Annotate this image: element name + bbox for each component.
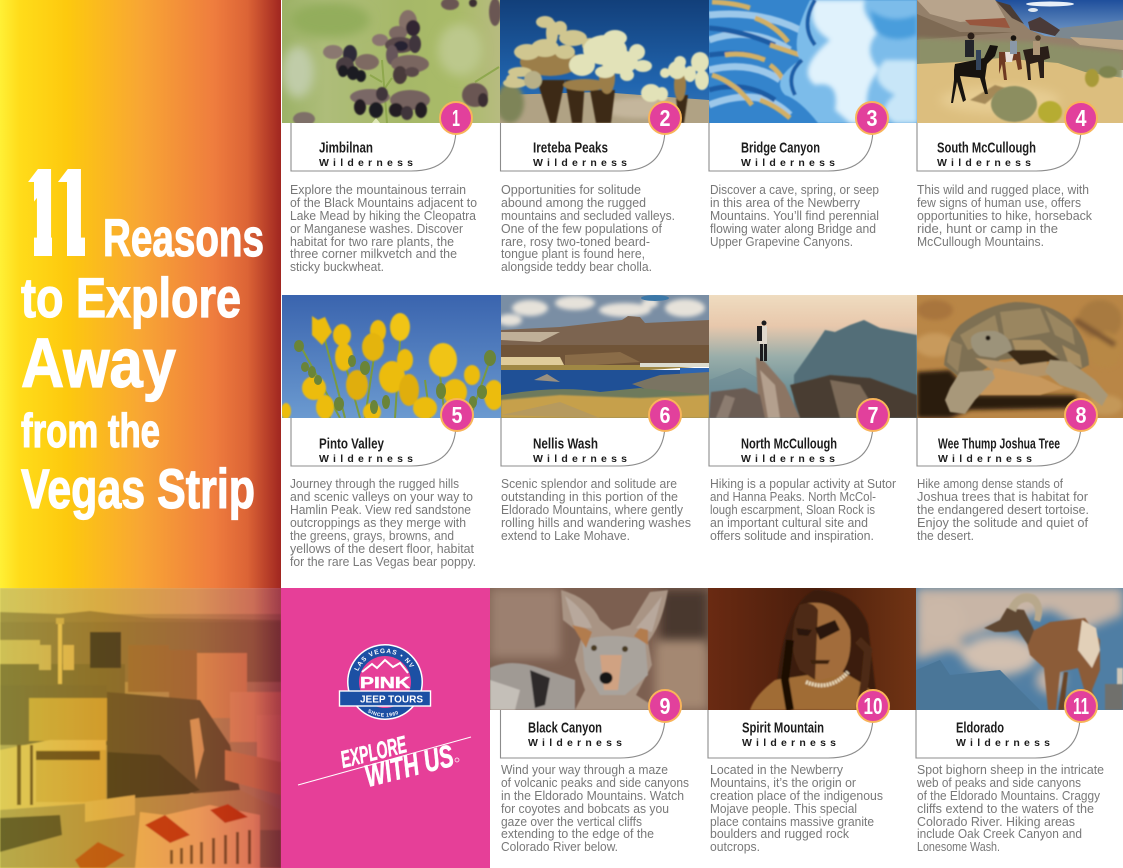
description: the desert. — [917, 529, 974, 543]
description: Upper Grapevine Canyons. — [710, 235, 853, 249]
heading: Ireteba Peaks — [533, 140, 608, 156]
card 8: Wee Thump Joshua Tree — [915, 295, 1123, 543]
title: to Explore — [21, 266, 241, 329]
logo: Pink Jeep Tours badge: SINCE 1960 — [368, 709, 398, 717]
heading: Pinto Valley — [319, 436, 385, 452]
description: the greens, grays, browns, and — [290, 529, 454, 543]
number badge: 7 — [868, 402, 878, 428]
subheading: Wilderness — [319, 453, 413, 465]
description: Hike among dense stands of — [917, 477, 1063, 491]
left gradient panel — [0, 0, 281, 588]
photo: yellow bear poppies — [282, 295, 501, 418]
description: Spot bighorn sheep in the intricate — [917, 763, 1104, 777]
number badge — [649, 102, 681, 134]
description: outstanding in this portion of the — [501, 490, 678, 504]
photo: purple buckwheat flowers — [282, 0, 500, 123]
description: Hiking is a popular activity at Sutor — [710, 477, 896, 491]
number badge — [1065, 399, 1097, 431]
subheading: Wilderness — [741, 157, 835, 169]
hiker silhouette — [757, 320, 767, 361]
title tab — [291, 418, 456, 466]
photo: horseback riders in the desert — [917, 0, 1123, 123]
heading: Eldorado — [956, 720, 1004, 736]
logo: Pink Jeep Tours badge — [338, 644, 432, 720]
number badge — [441, 399, 473, 431]
description: and Hanna Peaks. North McCol- — [710, 490, 876, 504]
subheading: Wilderness — [938, 453, 1032, 465]
number badge — [857, 690, 889, 722]
description: McCullough Mountains. — [917, 235, 1044, 249]
subheading: Wilderness — [741, 453, 835, 465]
description: and scenic valleys on your way to — [290, 490, 473, 504]
slogan: Explore With Us — [298, 731, 471, 794]
card 2: Ireteba Peaks — [496, 0, 709, 274]
description: Mountains. You’ll find perennial — [710, 209, 879, 223]
description: Mountains, it’s the origin or — [710, 776, 856, 790]
photo: lake and mesa landscape — [501, 295, 709, 418]
description: extend to Lake Mohave. — [501, 529, 630, 543]
description: Opportunities for solitude — [501, 183, 641, 197]
description: Scenic splendor and solitude are — [501, 477, 677, 491]
description: in this area of the Newberry — [710, 196, 861, 210]
description: abound among the rugged — [501, 196, 646, 210]
photo: bighorn sheep — [916, 588, 1123, 710]
description: Colorado River below. — [501, 840, 618, 854]
subheading: Wilderness — [319, 157, 413, 169]
description: of volcanic peaks and side canyons — [501, 776, 689, 790]
description: Colorado River. Hiking areas — [917, 815, 1075, 829]
description: three corner milkvetch and the — [290, 247, 457, 261]
description: flowing water along Bridge and — [710, 222, 876, 236]
title tab — [501, 418, 665, 466]
description: Eldorado Mountains, where gently — [501, 503, 684, 517]
dark trunks — [537, 80, 688, 123]
horses and riders — [951, 32, 1050, 103]
title tab — [917, 418, 1081, 466]
description: creation place of the indigenous — [710, 789, 883, 803]
logo: Pink Jeep Tours badge: PINK — [360, 675, 411, 692]
card 10: Spirit Mountain — [708, 588, 916, 854]
number badge: 1 — [452, 105, 460, 131]
description: rare, rosy two-toned beard- — [501, 235, 650, 249]
subheading: Wilderness — [742, 737, 836, 749]
card 9: Black Canyon — [490, 588, 708, 854]
description: alongside teddy bear cholla. — [501, 260, 652, 274]
slogan: Explore With Us: WITH US — [361, 738, 457, 794]
heading: Jimbilnan — [319, 140, 373, 156]
number badge: 2 — [660, 105, 670, 131]
description: This wild and rugged place, with — [917, 183, 1089, 197]
description: mountains and secluded valleys. — [501, 209, 675, 223]
description: Hamlin Peak. View red sandstone — [290, 503, 471, 517]
description: One of the few populations of — [501, 222, 662, 236]
title tab — [708, 710, 873, 758]
card 6: Nellis Wash — [498, 295, 709, 543]
photo: desert tortoise — [917, 295, 1123, 418]
heading: Wee Thump Joshua Tree — [938, 436, 1060, 452]
description: few signs of human use, offers — [917, 196, 1081, 210]
description: sticky buckwheat. — [290, 260, 384, 274]
card 4: South McCullough — [917, 0, 1123, 249]
number badge — [1065, 102, 1097, 134]
description: of the Black Mountains adjacent to — [290, 196, 477, 210]
number badge — [857, 399, 889, 431]
description: rolling hills and wandering washes — [501, 516, 691, 530]
number badge: 5 — [452, 402, 463, 428]
subheading: Wilderness — [528, 737, 622, 749]
title tab — [709, 418, 873, 466]
title tab — [500, 710, 665, 758]
description: Enjoy the solitude and quiet of — [917, 516, 1088, 530]
number badge: 8 — [1076, 402, 1087, 428]
title tab — [709, 123, 873, 171]
heading: Spirit Mountain — [742, 720, 824, 736]
number badge: 3 — [866, 105, 878, 131]
logo: Pink Jeep Tours badge: JEEP TOURS — [360, 694, 423, 706]
number badge: 6 — [660, 402, 670, 428]
number badge: 11 — [1073, 693, 1089, 719]
description: in the Eldorado Mountains. Watch — [501, 789, 684, 803]
card 5: Pinto Valley — [281, 295, 504, 569]
description: Journey through the rugged hills — [290, 477, 459, 491]
description: opportunities to hike, horseback — [917, 209, 1093, 223]
photo: Las Vegas Strip aerial view tinted orange — [0, 588, 281, 868]
description: Wind your way through a maze — [501, 763, 668, 777]
photo: blue river rapids — [709, 0, 917, 123]
description: place contains massive granite — [710, 815, 874, 829]
subheading: Wilderness — [956, 737, 1050, 749]
subheading: Wilderness — [533, 453, 627, 465]
photo: teddy bear cholla — [500, 0, 709, 123]
description: yellows of the desert floor, habitat — [290, 542, 474, 556]
number badge — [649, 690, 681, 722]
description: for coyotes and bobcats as you — [501, 802, 669, 816]
card 7: North McCullough — [709, 295, 917, 543]
description: Explore the mountainous terrain — [290, 183, 466, 197]
description: ride, hunt or camp in the — [917, 222, 1058, 236]
number badge: 4 — [1076, 105, 1087, 131]
photo: Mojave man portrait — [708, 588, 916, 710]
number badge — [440, 102, 472, 134]
description: outcrops. — [710, 840, 760, 854]
title: from the — [21, 404, 160, 457]
panel: pink logo panel — [281, 588, 490, 868]
description: cliffs extend to the waters of the — [917, 802, 1094, 816]
title tab — [291, 123, 456, 171]
title tab — [500, 123, 665, 171]
card 11: Eldorado — [916, 588, 1123, 854]
description: web of peaks and side canyons — [916, 776, 1081, 790]
title — [21, 146, 264, 520]
description: outcroppings as they merge with — [290, 516, 466, 530]
number badge — [856, 102, 888, 134]
title: 11 — [26, 146, 89, 282]
description: the endangered desert tortoise. — [917, 503, 1089, 517]
number badge: 9 — [660, 693, 670, 719]
title: Reasons — [103, 209, 264, 268]
description: or Manganese washes. Discover — [290, 222, 463, 236]
description: offers solitude and inspiration. — [710, 529, 874, 543]
description: for the rare Las Vegas bear poppy. — [290, 555, 476, 569]
description: Located in the Newberry — [710, 763, 844, 777]
description: Mojave people. This special — [710, 802, 857, 816]
title tab — [916, 710, 1080, 758]
number badge — [1065, 690, 1097, 722]
description: Discover a cave, spring, or seep — [710, 183, 879, 197]
heading: North McCullough — [741, 436, 837, 452]
heading: Bridge Canyon — [741, 140, 820, 156]
description: lough escarpment, Sloan Rock is — [710, 503, 875, 517]
title tab — [917, 123, 1081, 171]
slogan: Explore With Us: EXPLORE — [338, 731, 410, 774]
description: Lake Mead by hiking the Cleopatra — [290, 209, 476, 223]
title: Vegas Strip — [21, 457, 255, 520]
number badge: 10 — [864, 693, 882, 719]
description: an important cultural site and — [710, 516, 868, 530]
description: extending to the edge of the — [501, 827, 654, 841]
subheading: Wilderness — [937, 157, 1031, 169]
description: Lonesome Wash. — [917, 840, 1000, 854]
description: boulders and rugged rock — [710, 827, 850, 841]
subheading: Wilderness — [533, 157, 627, 169]
title: Away — [21, 324, 176, 402]
heading: South McCullough — [937, 140, 1036, 156]
description: Joshua trees that is habitat for — [917, 490, 1088, 504]
number badge — [649, 399, 681, 431]
heading: Nellis Wash — [533, 436, 598, 452]
description: tongue plant is found here, — [501, 247, 645, 261]
heading: Black Canyon — [528, 720, 602, 736]
description: of the Eldorado Mountains. Craggy — [917, 789, 1101, 803]
card 3: Bridge Canyon — [709, 0, 917, 249]
logo: Pink Jeep Tours badge: LAS VEGAS • NV — [354, 648, 414, 671]
card 1: Jimbilnan — [282, 0, 501, 274]
description: gaze over the vertical cliffs — [501, 815, 642, 829]
description: habitat for two rare plants, the — [290, 235, 454, 249]
photo: coyote — [490, 588, 708, 710]
description: include Oak Creek Canyon and — [917, 827, 1082, 841]
photo: hiker on a rocky peak — [709, 295, 917, 418]
